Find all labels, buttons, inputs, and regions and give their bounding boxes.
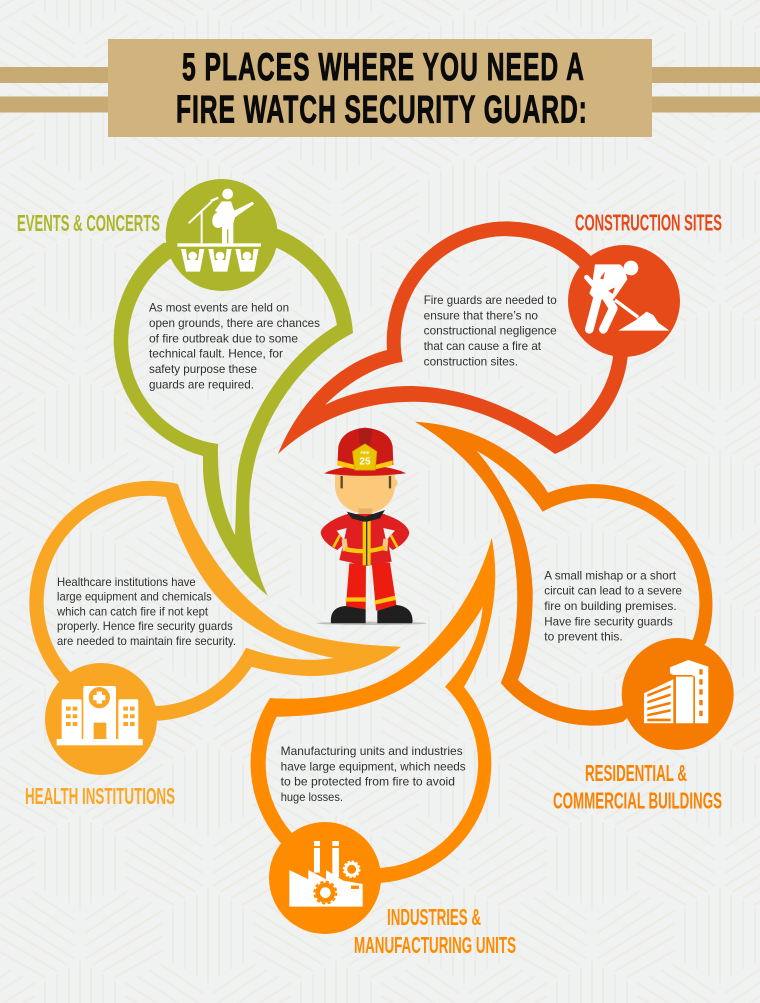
text: industries and manufacturing units: to be protected from fire to avoid (281, 776, 455, 789)
text: construction sites: that can cause a fire at (424, 340, 542, 353)
text: construction sites: construction sites. (424, 356, 518, 369)
icon: factory (289, 841, 363, 907)
panel: health institutions (25, 481, 401, 809)
text: residential and commercial buildings (544, 569, 682, 644)
icon: buildings (644, 660, 708, 723)
text: residential and commercial buildings: fire on building premises. (544, 600, 677, 613)
firefighter illustration (317, 428, 427, 625)
heading: residential and commercial buildings: RESIDENTIAL & (585, 760, 687, 786)
text: events and concerts: open grounds, there are chances (149, 317, 320, 330)
text: residential and commercial buildings: A small mishap or a short (544, 569, 677, 582)
text: residential and commercial buildings: to prevent this. (544, 631, 623, 644)
heading: industries and manufacturing units: MANUFACTURING UNITS (354, 932, 516, 958)
panel: construction sites (278, 210, 722, 454)
text: industries and manufacturing units: have large equipment, which needs (281, 760, 466, 773)
firefighter illustration: FIRE (360, 450, 370, 455)
text: industries and manufacturing units: Manufacturing units and industries (281, 745, 463, 758)
panel: residential and commercial buildings (415, 422, 734, 814)
text: construction sites: Fire guards are needed to (424, 294, 557, 307)
text: events and concerts: guards are required. (149, 378, 254, 391)
text: health institutions: Healthcare institutions have (57, 576, 196, 589)
firefighter illustration: 25 (359, 456, 371, 467)
heading: health institutions: HEALTH INSTITUTIONS (25, 783, 175, 809)
text: construction sites: ensure that there’s no (424, 309, 538, 322)
panel: events and concerts (17, 179, 353, 596)
title banner: 5 PLACES WHERE YOU NEED A (182, 45, 584, 88)
text: events and concerts: As most events are held on (149, 302, 289, 315)
text: health institutions: large equipment and chemicals (57, 591, 212, 604)
text: events and concerts: safety purpose these (149, 363, 257, 376)
text: health institutions: are needed to maintain fire security. (57, 635, 236, 648)
title banner (0, 39, 760, 137)
panel: industries and manufacturing units (251, 538, 516, 958)
text: residential and commercial buildings: Have fire security guards (544, 615, 673, 628)
heading: residential and commercial buildings (553, 760, 722, 814)
heading: industries and manufacturing units: INDUSTRIES & (387, 904, 481, 930)
title banner: FIRE WATCH SECURITY GUARD: (176, 88, 587, 131)
text: events and concerts: of fire outbreak due to some (149, 332, 298, 345)
icon: hospital (57, 686, 143, 745)
text: industries and manufacturing units (281, 745, 466, 804)
text: health institutions: properly. Hence fire security guards (57, 620, 233, 633)
text: events and concerts: technical fault. Hence, for (149, 348, 283, 361)
text: health institutions: which can catch fire if not kept (56, 605, 209, 618)
heading: events and concerts: EVENTS & CONCERTS (17, 210, 160, 236)
text: health institutions (56, 576, 236, 648)
icon: worker with shovel (587, 261, 669, 331)
text: construction sites (424, 294, 557, 369)
text: industries and manufacturing units: huge losses. (281, 791, 343, 804)
icon: musician on stage with crowd (177, 189, 261, 272)
text: events and concerts (149, 302, 320, 391)
text: construction sites: constructional negligence (424, 325, 557, 338)
text: residential and commercial buildings: circuit can lead to a severe (544, 585, 682, 598)
heading: industries and manufacturing units (354, 904, 516, 958)
